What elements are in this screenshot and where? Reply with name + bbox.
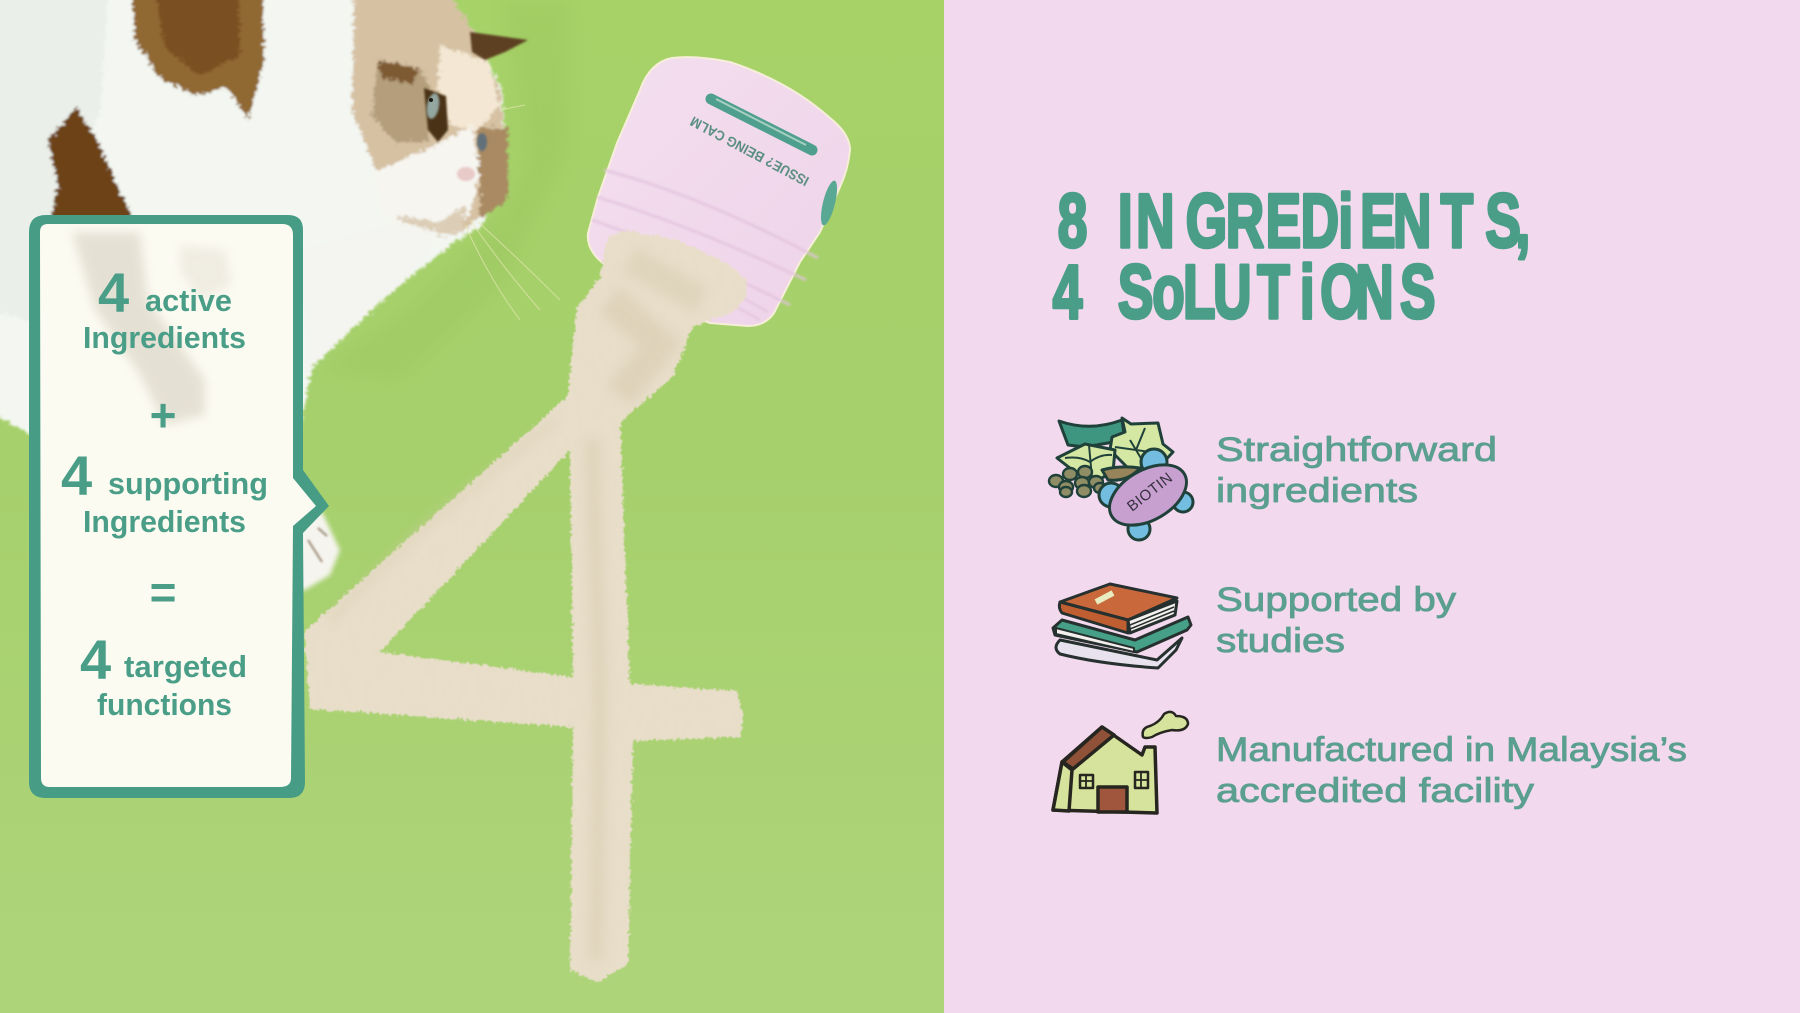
text: 4 targeted functions: 4 (80, 628, 111, 691)
jar label text: ISSUE? BEING CALM (687, 113, 811, 189)
text: 4 supporting ingredients: 4 (61, 444, 92, 507)
panel: green photo background (0, 0, 944, 1013)
title: 8 ingredients, 4 solutions (1053, 179, 1530, 334)
whiskers (465, 105, 560, 320)
text: supported by studies (1216, 581, 1456, 660)
text: straightforward ingredients: Straightforward (1216, 431, 1497, 469)
text: supported by studies: studies (1216, 622, 1345, 660)
ghosted cat behind the translucent card (72, 232, 232, 425)
panel: pink content background (944, 0, 1800, 1013)
paw (295, 505, 340, 590)
photo: pink supplement jar tipped over (588, 57, 850, 326)
text: supported by studies: Supported by (1216, 581, 1456, 619)
photo: cat lying on green surface (0, 0, 570, 590)
jar label bar (711, 99, 812, 150)
text: manufactured in Malaysia's accredited facility: accredited facility (1216, 772, 1534, 810)
icon: stack of books (1053, 584, 1191, 668)
text: manufactured in Malaysia's accredited facility: Manufactured in Malaysia’s (1216, 731, 1687, 769)
text: 4 targeted functions: targeted (124, 649, 247, 684)
eye (424, 88, 448, 142)
icon: leaves and biotin pill (1049, 418, 1197, 540)
text: 4 active ingredients: Ingredients (83, 320, 246, 355)
operator: equals: = (150, 566, 176, 618)
text: 4 targeted functions (80, 628, 247, 722)
text: 4 supporting ingredients (61, 444, 268, 539)
icon: green house with smoke (1053, 712, 1188, 813)
title: 8 ingredients, 4 solutions: 4 SoLUTiONS (1053, 250, 1435, 334)
text: 4 supporting ingredients: supporting (108, 466, 268, 501)
jar neck ridges (592, 170, 818, 320)
text: 4 active ingredients: active (145, 283, 232, 318)
operator: plus: + (150, 389, 176, 441)
text: straightforward ingredients (1216, 431, 1497, 510)
title: 8 ingredients, 4 solutions: 8 INGREDiENTS, (1058, 179, 1530, 263)
text: manufactured in Malaysia's accredited facility (1216, 731, 1687, 810)
icon: leaves and biotin pill: BIOTIN (1124, 469, 1176, 515)
text: 4 supporting ingredients: Ingredients (83, 504, 246, 539)
jar side label (818, 179, 840, 227)
callout: ingredient equation card (29, 215, 329, 798)
nose (457, 167, 475, 181)
text: straightforward ingredients: ingredients (1216, 472, 1418, 510)
ear (470, 32, 528, 60)
text: 4 targeted functions: functions (97, 687, 232, 722)
text: 4 active ingredients: 4 (98, 261, 129, 324)
text: 4 active ingredients (83, 261, 246, 355)
photo: powder spilling from jar in the shape of a 4 (304, 230, 747, 982)
